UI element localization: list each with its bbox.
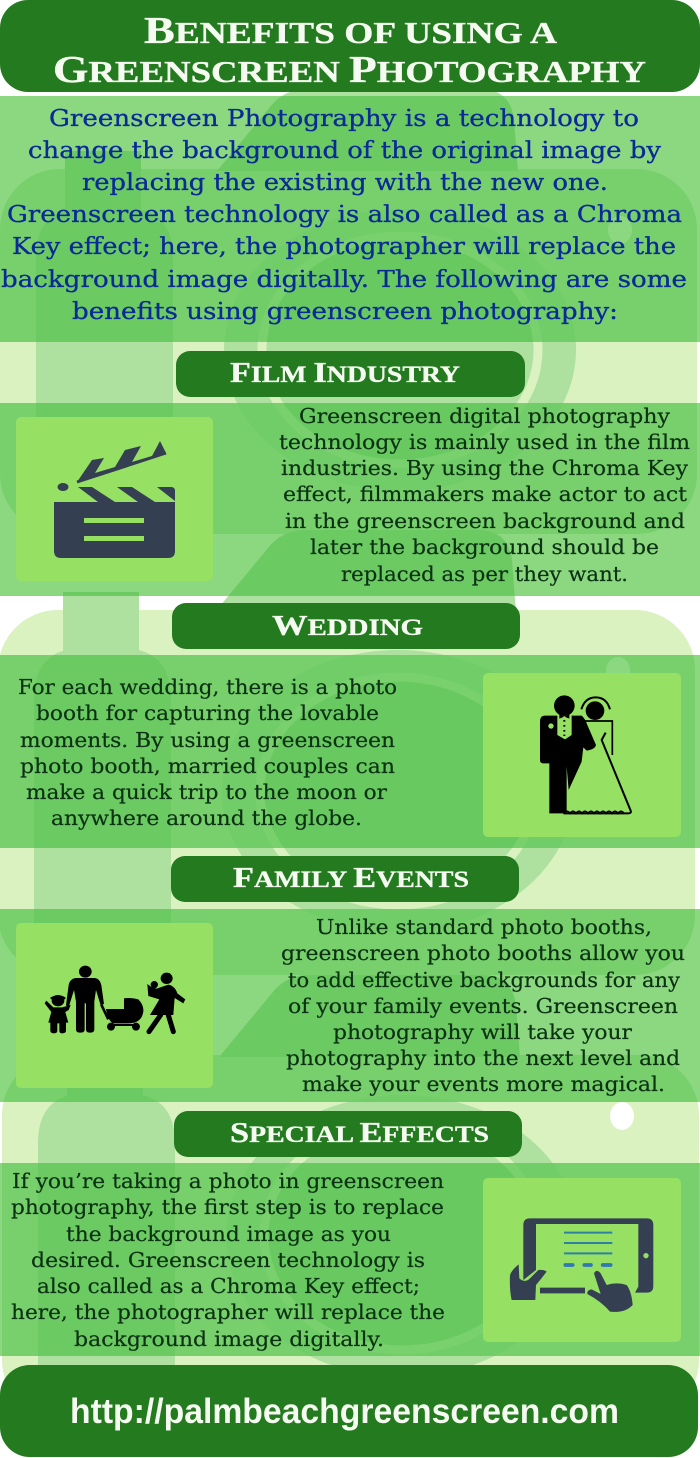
text: Film Industry [279,404,690,586]
panel: introduction: background image digitally. The following are some [1,265,687,293]
text: Special Effects: If you’re taking a photo in greenscreen [12,1169,444,1193]
text: Wedding: booth for capturing the lovable [36,701,379,725]
icon card: tablet [483,1178,681,1342]
text: Wedding: photo booth, married couples can [20,754,395,778]
text: Family Events [281,915,685,1096]
icon card: family [16,923,213,1088]
text: Film Industry: technology is mainly used in the film [279,430,690,454]
panel: introduction [0,96,700,342]
panel: Family Events [0,909,700,1102]
panel: Wedding [0,655,700,848]
icon card: clapperboard [16,417,213,581]
heading: Wedding: W EDDING [272,611,423,642]
title banner: GREENSCREEN PHOTOGRAPHY [53,49,646,91]
text: Special Effects: also called as a Chroma Key effect; [37,1274,420,1298]
panel: introduction: Key effect; here, the photographer will replace the [12,232,676,260]
text: Film Industry: industries. By using the Chroma Key [281,456,688,480]
text: Film Industry: in the greenscreen background and [285,509,685,533]
footer banner: website URL: http://palmbeachgreenscreen.com [70,1392,619,1431]
panel: introduction: benefits using greenscreen photography: [72,297,618,325]
text: Wedding: anywhere around the globe. [51,806,362,830]
text: Family Events: make your events more magical. [302,1072,665,1096]
panel: introduction: replacing the existing with the new one. [82,168,608,196]
text: Special Effects: the background image as you [66,1222,391,1246]
panel: introduction: Greenscreen technology is also called as a Chroma [7,200,682,228]
footer banner: website URL [0,1365,698,1457]
panel: introduction: change the background of the original image by [28,136,662,164]
text: Film Industry: effect, filmmakers make actor to act [283,482,688,506]
text: Special Effects: photography, the first step is to replace [11,1195,444,1219]
text: Family Events: photography into the next level and [286,1046,680,1070]
text: Family Events: to add effective backgrounds for any [288,968,680,992]
text: Special Effects: background image digitally. [74,1327,384,1351]
text: Film Industry: later the background should be [310,535,659,559]
text: Family Events: Unlike standard photo booths, [316,915,652,939]
heading: Special Effects: SPECIAL EFFECTS [230,1118,489,1149]
text: Family Events: photography will take your [333,1020,632,1044]
text: Special Effects [11,1169,445,1351]
panel: Special Effects [0,1163,700,1356]
text: Wedding: For each wedding, there is a photo [18,675,397,699]
heading: Film Industry [176,351,525,397]
heading: Film Industry: FILM INDUSTRY [230,358,460,389]
text: Family Events: of your family events. Greenscreen [288,994,678,1018]
text: Wedding: moments. By using a greenscreen [20,728,395,752]
heading: Wedding [172,603,520,649]
panel: Film Industry [0,403,700,596]
text: Wedding [18,675,397,830]
icon card: bride and groom [483,673,681,837]
title banner [0,0,700,92]
panel: introduction: Greenscreen Photography is a technology to [49,104,639,132]
title banner: BENEFITS OF USING A [144,10,557,52]
heading: Special Effects [174,1111,522,1157]
text: Wedding: make a quick trip to the moon or [26,780,387,804]
text: Special Effects: desired. Greenscreen technology is [31,1248,425,1272]
heading: Family Events [171,856,519,902]
heading: Family Events: FAMILY EVENTS [233,863,469,894]
text: Film Industry: Greenscreen digital photography [299,404,670,428]
text: Special Effects: here, the photographer will replace the [11,1300,445,1324]
text: Family Events: greenscreen photo booths allow you [281,941,685,965]
text: Film Industry: replaced as per they want. [341,562,628,586]
